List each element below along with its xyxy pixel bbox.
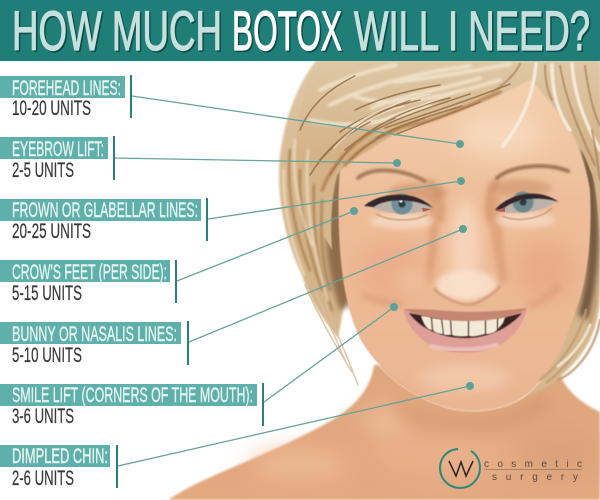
label: forehead lines: 10-20 UNITS	[12, 97, 91, 120]
label: bunny or nasalis lines: BUNNY OR NASALIS LINES:	[12, 323, 177, 346]
label: bunny or nasalis lines	[0, 321, 189, 367]
label: smile lift: 3-6 UNITS	[12, 405, 74, 428]
label: smile lift	[0, 383, 264, 428]
hair fringe	[295, 61, 600, 250]
photo: smiling woman	[168, 61, 600, 500]
label: frown or glabellar lines	[0, 198, 208, 243]
label: eyebrow lift	[0, 136, 115, 182]
eye: right	[495, 192, 559, 228]
leader lines and dots	[115, 96, 474, 466]
teeth	[421, 315, 506, 336]
title: HOW MUCH	[14, 0, 224, 64]
hair strands	[284, 64, 600, 385]
title: BOTOX	[232, 0, 342, 62]
label: crow's feet: CROW'S FEET (PER SIDE):	[12, 261, 167, 284]
label: dimpled chin	[0, 445, 118, 490]
label: smile lift: SMILE LIFT (CORNERS OF THE MOUTH):	[12, 384, 253, 407]
logo: W cosmetic surgery: cosmetic	[484, 459, 582, 470]
nose	[396, 266, 500, 304]
title	[12, 0, 592, 64]
label: frown or glabellar lines: FROWN OR GLABELLAR LINES:	[12, 199, 198, 222]
label: eyebrow lift: 2-5 UNITS	[12, 159, 74, 182]
hair back	[279, 61, 600, 395]
title: BOTOX	[234, 0, 344, 64]
label: dimpled chin: 2-6 UNITS	[12, 467, 74, 490]
smile	[403, 308, 527, 353]
logo: W cosmetic surgery: surgery	[492, 472, 578, 483]
eyebrows	[358, 166, 568, 181]
chin shadow	[400, 408, 414, 419]
label: eyebrow lift: EYEBROW LIFT:	[12, 138, 104, 161]
label: forehead lines: FOREHEAD LINES:	[12, 77, 121, 100]
label: frown or glabellar lines: 20-25 UNITS	[12, 220, 91, 243]
eye: left	[364, 194, 434, 229]
label: forehead lines	[0, 75, 132, 120]
face	[338, 75, 590, 411]
label: bunny or nasalis lines: 5-10 UNITS	[12, 344, 82, 367]
hair shadow by the face	[326, 170, 352, 310]
jaw outline	[376, 362, 542, 411]
label: crow's feet	[0, 260, 177, 305]
label: dimpled chin: DIMPLED CHIN:	[12, 445, 108, 468]
header banner	[0, 0, 600, 61]
label: crow's feet: 5-15 UNITS	[12, 282, 82, 305]
logo: W cosmetic surgery	[440, 449, 582, 488]
shoulders and neck	[168, 360, 600, 500]
face shading	[358, 113, 575, 392]
title: HOW MUCH	[12, 0, 222, 62]
neck highlights	[250, 406, 600, 479]
